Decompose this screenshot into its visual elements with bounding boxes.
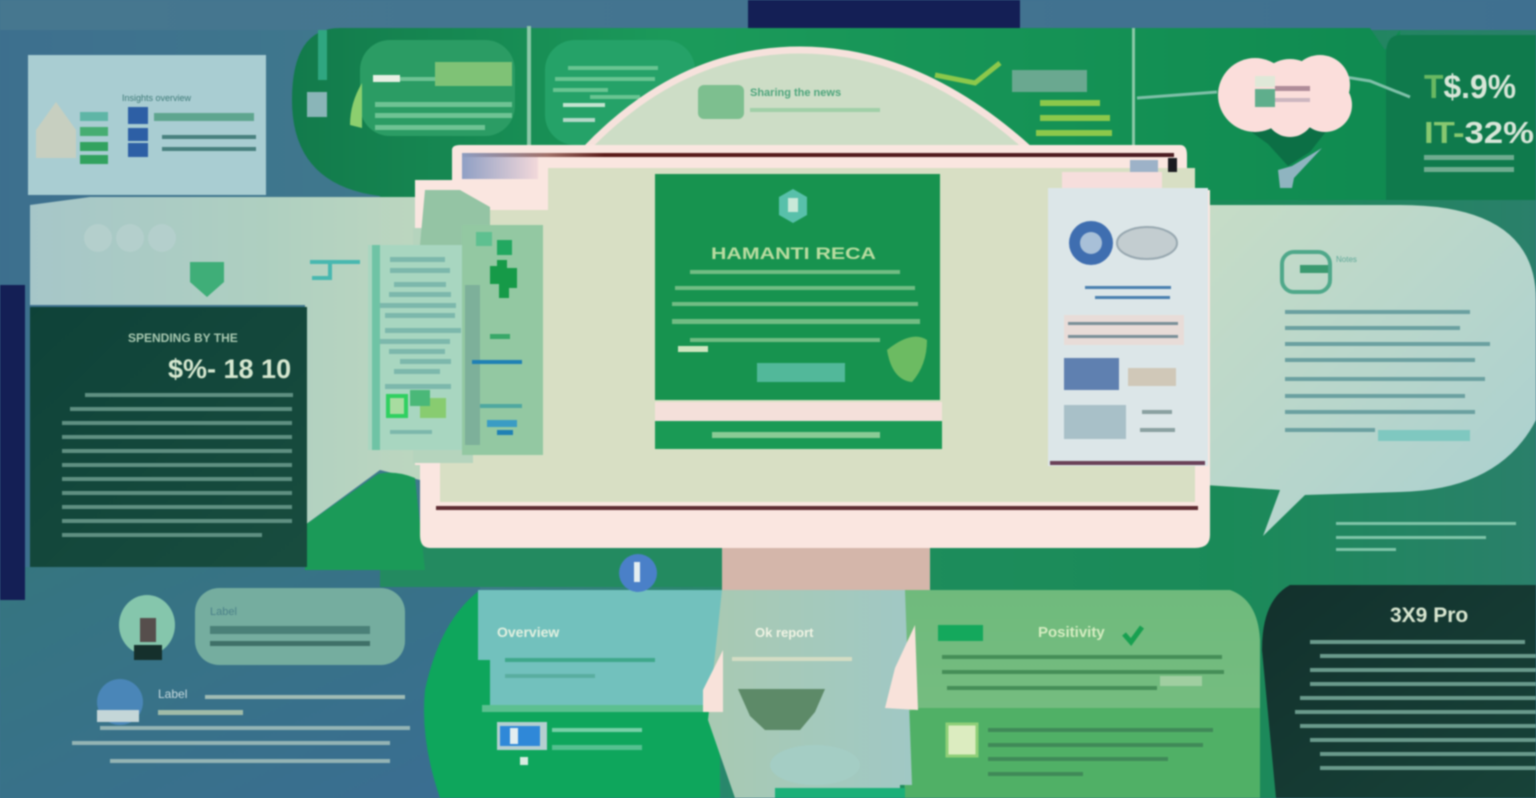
highlight — [1160, 676, 1202, 686]
panel: right document — [1048, 172, 1208, 466]
panel: bottom right dark article — [1262, 585, 1536, 798]
panel: top green band — [292, 26, 1400, 200]
pill: top left callout — [360, 40, 515, 136]
chart: rising line — [935, 63, 1000, 83]
green belt under monitor — [380, 545, 725, 587]
icon: arrow tail — [1278, 148, 1322, 188]
connector — [310, 262, 360, 278]
pill: middle callout — [545, 40, 695, 145]
badge — [1117, 227, 1177, 259]
chart block — [435, 62, 512, 86]
icon: leaf — [887, 337, 927, 382]
paragraph lines — [62, 393, 293, 537]
icon: leaf — [350, 83, 362, 128]
panel: right speech bubble — [1205, 205, 1536, 536]
blue marks — [472, 360, 522, 364]
panel: bottom centre pale card — [703, 590, 918, 798]
heading: 3X9 Pro — [1390, 604, 1468, 627]
monitor — [413, 145, 1210, 591]
icon: top clover — [476, 232, 512, 255]
icon: chat — [1282, 252, 1330, 292]
frame — [415, 145, 1210, 548]
panel: top right stats — [1386, 35, 1536, 200]
lower lines — [988, 728, 1213, 776]
panel: dark left article — [30, 307, 307, 567]
card heading: HAMANTI RECA — [711, 244, 876, 263]
navy bar left — [0, 285, 25, 600]
card lines — [672, 270, 920, 342]
pale strip — [655, 402, 942, 421]
avatar — [119, 595, 175, 655]
dark rule top — [462, 153, 1174, 157]
small avatar — [97, 679, 143, 725]
heading: Positivity — [1038, 624, 1105, 641]
stat one: T$.9% — [1424, 68, 1516, 105]
icon: teal badge — [779, 189, 807, 223]
stand — [722, 545, 930, 591]
doc lines — [380, 257, 461, 434]
card footer — [655, 421, 942, 449]
arch badge — [698, 85, 880, 119]
dots — [84, 224, 176, 252]
teal lines — [505, 658, 655, 662]
stat two: IT-32% — [1424, 115, 1534, 150]
button — [757, 363, 845, 382]
text block — [1064, 315, 1184, 345]
chip — [373, 75, 400, 82]
callout lines — [375, 77, 512, 130]
lines — [1295, 640, 1536, 770]
panel: bottom left profile: Label — [210, 606, 237, 618]
heading: Ok report — [755, 625, 814, 640]
navy bar top — [748, 0, 1020, 28]
icon: shield — [190, 262, 224, 297]
right title block — [1130, 160, 1158, 179]
dark rule bottom — [436, 506, 1198, 510]
big number: $%- 18 10 — [168, 354, 291, 384]
row one — [1064, 358, 1119, 390]
arch badge: Sharing the news — [750, 87, 841, 99]
heading: SPENDING BY THE — [128, 331, 238, 345]
icon: check — [1124, 627, 1142, 642]
icon: clock badge — [619, 554, 657, 592]
panel: left light strip — [30, 197, 420, 525]
strip patch — [413, 228, 473, 463]
tag — [938, 625, 983, 641]
underline — [1050, 461, 1205, 465]
bottom bright strip — [775, 788, 905, 798]
heading line — [1085, 286, 1171, 289]
green wedge — [305, 473, 425, 570]
background upper band — [0, 0, 1536, 30]
panel: bottom right green card — [900, 590, 1260, 798]
panel: top left legend — [28, 55, 266, 195]
pink side marks — [703, 650, 723, 712]
panel: bottom teal card — [478, 590, 722, 712]
right sheet — [462, 225, 543, 455]
pill — [195, 588, 405, 665]
panel: central green card — [655, 174, 942, 449]
icon: house — [36, 102, 76, 158]
callout: cloud bubble — [1137, 55, 1410, 188]
left sheet — [368, 245, 462, 450]
title bar — [462, 157, 538, 179]
window controls — [1168, 158, 1177, 172]
panel: right speech bubble: Notes — [1336, 255, 1357, 264]
green stamp — [388, 390, 446, 418]
lower left backdrop — [0, 567, 480, 798]
lines — [942, 655, 1224, 690]
screen — [440, 168, 1195, 502]
row two — [1064, 405, 1126, 439]
icon: green clover — [490, 260, 517, 298]
arch behind monitor — [585, 50, 1030, 150]
panel: bottom left profile — [72, 588, 410, 763]
teal heading: Overview — [497, 624, 559, 640]
panel: left document — [368, 190, 543, 455]
icon: pale shield and stem — [307, 30, 327, 117]
lines — [72, 726, 410, 763]
panel: top left legend: Insights overview — [122, 93, 192, 103]
caption: Label — [158, 687, 187, 701]
bubble lines — [1285, 310, 1490, 432]
panel: bottom centre green blob — [424, 590, 720, 798]
icon: lock — [1255, 76, 1275, 87]
icon: green seal — [947, 724, 977, 756]
icon: blue badge — [497, 722, 642, 765]
bowl chart — [738, 689, 825, 730]
icon: blue circle — [1069, 221, 1113, 265]
text under bubble — [1336, 522, 1516, 551]
card base strip — [482, 705, 717, 712]
